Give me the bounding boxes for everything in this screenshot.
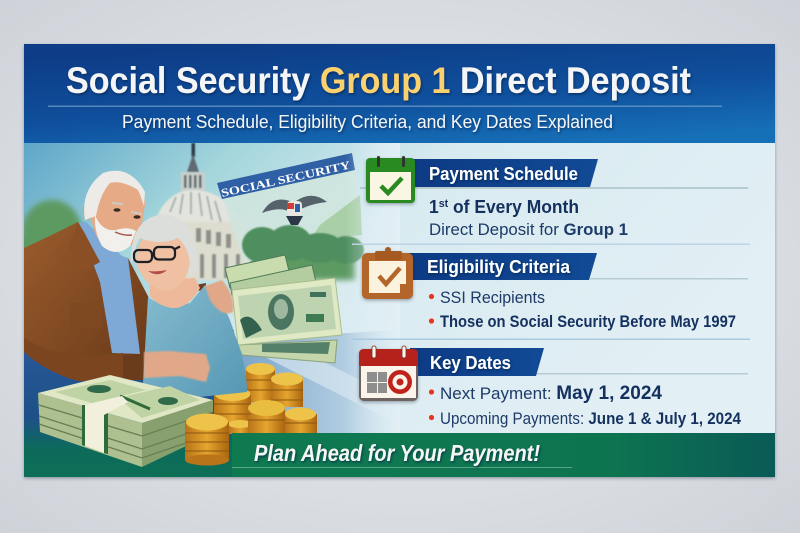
date text: 1 <box>429 197 439 217</box>
panel: payment schedule <box>360 156 748 239</box>
social security card: SOCIAL SECURITY <box>220 159 352 200</box>
coins back <box>214 363 317 434</box>
footer banner <box>232 433 775 477</box>
detail text: Direct Deposit for Group 1 <box>429 220 628 239</box>
heading ribbon <box>405 253 597 280</box>
social security card <box>217 153 364 264</box>
bullet list: Next Payment: May 1, 2024 <box>440 383 662 404</box>
header band <box>24 44 775 143</box>
panel: fade edge <box>345 143 400 433</box>
heading ribbon: Eligibility Criteria <box>427 257 571 277</box>
bullet list <box>429 383 742 428</box>
heading ribbon <box>410 159 598 187</box>
panel: illustration <box>24 143 544 477</box>
title: Social Security Group 1 Direct Deposit <box>66 60 691 101</box>
icon: clipboard <box>362 247 413 299</box>
jacket arm <box>198 283 206 291</box>
woman head <box>131 214 198 291</box>
panel: key dates <box>359 346 748 428</box>
neck <box>150 278 200 308</box>
trees <box>24 196 359 284</box>
coin stack front <box>185 414 229 466</box>
heading ribbon <box>410 348 544 376</box>
man head <box>84 171 145 252</box>
bullet list: Those on Social Security Before May 1997 <box>440 313 736 331</box>
big bill <box>232 278 342 345</box>
icon: green calendar <box>366 156 415 203</box>
subtitle: Payment Schedule, Eligibility Criteria, and Key Dates Explained <box>122 111 613 132</box>
cash stack <box>38 375 213 467</box>
heading ribbon: Payment Schedule <box>429 164 578 184</box>
bullet list <box>429 289 736 331</box>
shirt <box>78 222 140 354</box>
card <box>10 44 775 477</box>
pocket <box>70 303 102 328</box>
heading ribbon: Key Dates <box>430 353 511 373</box>
bills fan <box>225 255 342 363</box>
jacket <box>24 222 150 381</box>
date text: st <box>439 198 449 210</box>
icon: red calendar <box>359 346 418 401</box>
man <box>24 171 150 381</box>
woman <box>131 214 247 398</box>
footer text: Plan Ahead for Your Payment! <box>254 440 540 466</box>
bullet list: Upcoming Payments: June 1 & July 1, 2024 <box>440 410 742 428</box>
bullet list: SSI Recipients <box>440 289 545 307</box>
panel: eligibility criteria <box>362 247 748 331</box>
icon: capitol building <box>158 143 250 280</box>
icon: eagle <box>262 196 327 225</box>
hands <box>144 280 233 382</box>
sweater <box>143 285 247 398</box>
date text: of Every Month <box>448 197 579 217</box>
